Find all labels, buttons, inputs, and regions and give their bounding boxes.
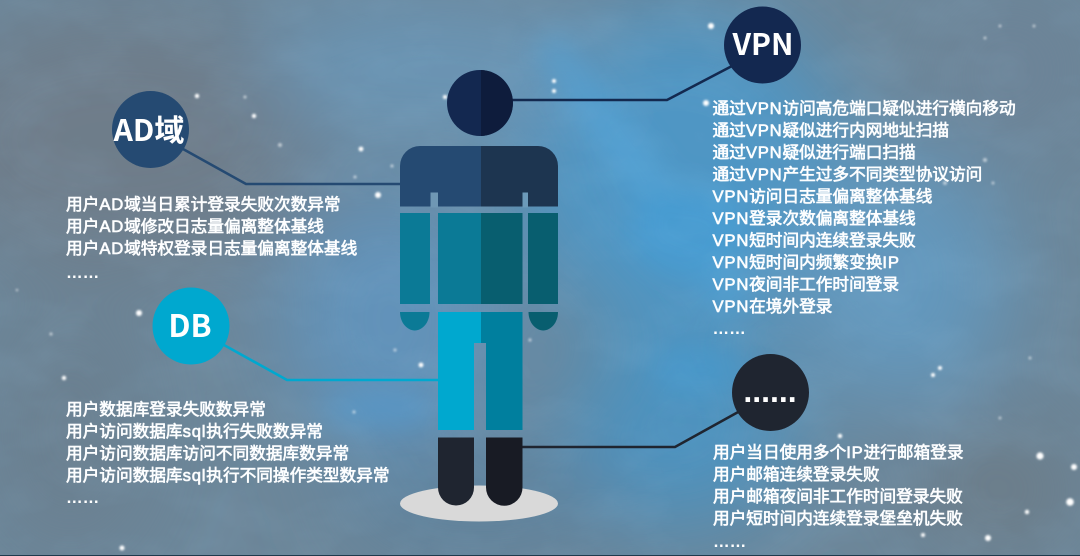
text block: other rules: 用户当日使用多个IP进行邮箱登录 [713, 443, 964, 462]
other circle [732, 354, 809, 431]
text block: VPN rules: VPN访问日志量偏离整体基线 [712, 186, 932, 206]
text block: VPN rules: 通过VPN疑似进行内网地址扫描 [712, 120, 949, 140]
connector: DB [224, 345, 440, 380]
text block: VPN rules: VPN短时间内频繁变换IP [712, 252, 900, 272]
boots [438, 438, 522, 506]
text block: AD rules: 用户AD域特权登录日志量偏离整体基线 [66, 239, 357, 258]
ground shadow ellipse [400, 486, 558, 522]
arms and body [400, 213, 558, 304]
connector: AD domain [183, 149, 402, 184]
text block: DB rules: …… [66, 488, 99, 507]
text block: VPN rules: …… [712, 318, 746, 338]
text block: DB rules: 用户访问数据库sql执行失败数异常 [66, 422, 323, 441]
text block: VPN rules: 通过VPN产生过多不同类型协议访问 [712, 164, 982, 184]
text block: AD rules: 用户AD域当日累计登录失败次数异常 [66, 195, 341, 214]
text block: DB rules: 用户访问数据库sql执行不同操作类型数异常 [66, 466, 390, 485]
text block: DB rules [66, 400, 390, 507]
hands [400, 312, 558, 330]
text block: VPN rules: VPN在境外登录 [712, 296, 832, 316]
connector: other [520, 411, 740, 447]
VPN circle [724, 6, 801, 84]
text block: VPN rules: VPN短时间内连续登录失败 [712, 230, 916, 250]
label: AD域: AD域 [114, 106, 184, 150]
text block: other rules: 用户邮箱连续登录失败 [713, 465, 880, 484]
text block: AD rules [66, 195, 357, 282]
connector: VPN [512, 66, 732, 100]
text block: AD rules: …… [66, 263, 99, 282]
DB circle [152, 288, 230, 364]
text block: VPN rules: 通过VPN访问高危端口疑似进行横向移动 [712, 98, 1016, 118]
text block: DB rules: 用户访问数据库访问不同数据库数异常 [66, 444, 349, 463]
text block: other rules: 用户短时间内连续登录堡垒机失败 [713, 509, 963, 528]
AD circle [112, 91, 189, 168]
text block: other rules: …… [713, 532, 746, 551]
head [447, 70, 513, 136]
label: other: ...... [743, 373, 797, 409]
text block: other rules [713, 443, 964, 551]
text block: other rules: 用户邮箱夜间非工作时间登录失败 [713, 487, 963, 506]
text block: AD rules: 用户AD域修改日志量偏离整体基线 [66, 217, 324, 236]
text block: VPN rules [712, 98, 1016, 338]
label: VPN: VPN [732, 20, 794, 64]
text block: VPN rules: VPN夜间非工作时间登录 [712, 274, 899, 294]
text block: VPN rules: VPN登录次数偏离整体基线 [712, 208, 916, 228]
text block: DB rules: 用户数据库登录失败数异常 [66, 400, 266, 419]
text block: VPN rules: 通过VPN疑似进行端口扫描 [712, 142, 916, 162]
legs [438, 312, 522, 430]
label: DB: DB [168, 301, 212, 346]
torso and shoulders [400, 146, 558, 208]
